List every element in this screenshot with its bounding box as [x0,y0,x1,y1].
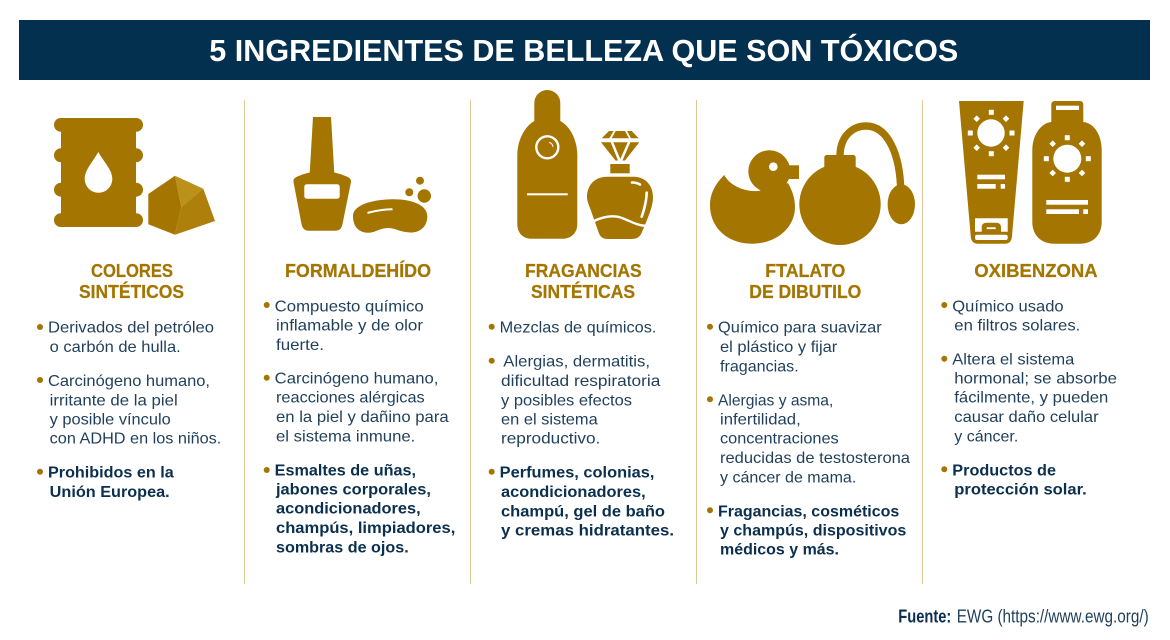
text: effects: fácilmente, y pueden [954,390,1108,407]
text: found in [707,503,906,559]
text: effects: reproductivo. [501,431,600,448]
text: found in: Fragancias, cosméticos [718,503,899,520]
text: description: inflamable y de olor [276,318,424,335]
text: found in: acondicionadores, [501,484,646,501]
heading: fragancias sintéticas [525,261,642,302]
text: effects: y cáncer de mama. [720,469,856,486]
text: found in: Perfumes, colonias, [500,465,654,482]
text: origin: Derivados del petróleo [48,320,214,337]
text: found in: Esmaltes de uñas, [275,462,416,479]
text: found in: y champús, dispositivos [720,523,906,540]
text: found in: médicos y más. [720,542,839,559]
title banner [19,20,1150,80]
text: effects [707,392,910,486]
text: effects: en la piel y dañino para [276,409,449,426]
icon: sunscreen bottle [1032,101,1102,244]
text: found in: Unión Europea. [50,484,170,501]
text: effects: reducidas de testosterona [720,450,910,467]
text: effects: dificultad respiratoria [501,373,660,390]
text: found in: Prohibidos en la [48,465,174,482]
text: description: Compuesto químico [275,298,424,315]
heading: ftalato de dibutilo: FTALATO [765,261,845,281]
text: found in: protección solar. [954,481,1087,498]
text: origin [37,320,214,356]
text: description: en filtros solares. [954,318,1080,335]
heading: formaldehído: FORMALDEHÍDO [285,260,431,281]
text: description: Químico para suavizar [718,320,882,337]
icon: rubber duck [710,150,799,244]
text: found in: jabones corporales, [275,481,431,498]
heading: fragancias sintéticas: FRAGANCIAS [525,261,642,281]
icon: soap [353,177,431,233]
heading: colores sintéticos [79,261,184,302]
panel: ftalato de dibutilo [707,126,915,559]
heading: fragancias sintéticas: SINTÉTICAS [531,281,635,302]
icon: nail polish [293,117,351,231]
source note: Fuente: [898,606,951,626]
text: effects [489,354,660,448]
icon: tall bottle [517,90,577,239]
text: effects: en el sistema [501,412,598,429]
text: description: fragancias. [720,358,799,375]
text: effects: Alergias, dermatitis, [503,354,650,371]
text: found in [941,462,1087,498]
icon: oil barrel [54,118,143,227]
heading: colores sintéticos: SINTÉTICOS [79,281,184,302]
text: found in: y cremas hidratantes. [501,522,674,539]
text: effects: Alergias y asma, [718,392,833,409]
text: effects: y cáncer. [954,428,1018,445]
title banner: 5 INGREDIENTES DE BELLEZA QUE SON TÓXICOS [209,32,958,68]
heading: oxibenzona: OXIBENZONA [974,261,1098,281]
text: effects: irritante de la piel [50,392,178,409]
text: description: Mezclas de químicos. [500,320,656,337]
panel: fragancias sintéticas [489,90,674,539]
text: origin: o carbón de hulla. [50,339,181,356]
text: description: el plástico y fijar [720,339,838,356]
text: found in: sombras de ojos. [276,539,409,556]
text: description: fuerte. [276,337,324,354]
text: effects [264,371,449,445]
text: found in: champús, limpiadores, [276,520,455,537]
text: effects: con ADHD en los niños. [50,431,221,448]
text: found in [264,462,455,556]
text: effects: Carcinógeno humano, [48,373,210,390]
text: found in [37,465,174,501]
text: effects: Carcinógeno humano, [275,371,438,388]
text: effects: y posible vínculo [50,412,171,429]
heading: colores sintéticos: COLORES [91,261,173,281]
text: effects [941,352,1117,445]
text: effects: Altera el sistema [952,352,1074,369]
panel: oxibenzona [941,101,1117,498]
text: description [264,298,424,354]
text: found in [489,465,674,539]
heading: ftalato de dibutilo [749,261,861,302]
text: description [941,298,1080,335]
text: effects: concentraciones [720,431,839,448]
panel: formaldehído [264,117,455,556]
text: found in: acondicionadores, [276,501,421,518]
text: effects: reacciones alérgicas [276,390,425,407]
text: effects: y posibles efectos [501,392,632,409]
icon: perfume flask [587,131,653,239]
text: effects: infertilidad, [720,412,801,429]
text: description: Químico usado [952,298,1064,315]
icon: sunscreen tube [959,101,1024,244]
text: found in: champú, gel de baño [501,503,665,520]
text: effects: hormonal; se absorbe [954,371,1117,388]
text: effects: el sistema inmune. [276,428,415,445]
text: description [707,320,882,375]
icon: coal rock [148,176,215,235]
icon: perfume atomizer [799,126,915,245]
text: effects: causar daño celular [954,409,1099,426]
heading: ftalato de dibutilo: DE DIBUTILO [749,282,861,302]
text: effects [37,373,221,448]
text: found in: Productos de [952,462,1056,479]
panel: colores sintéticos [37,118,221,501]
